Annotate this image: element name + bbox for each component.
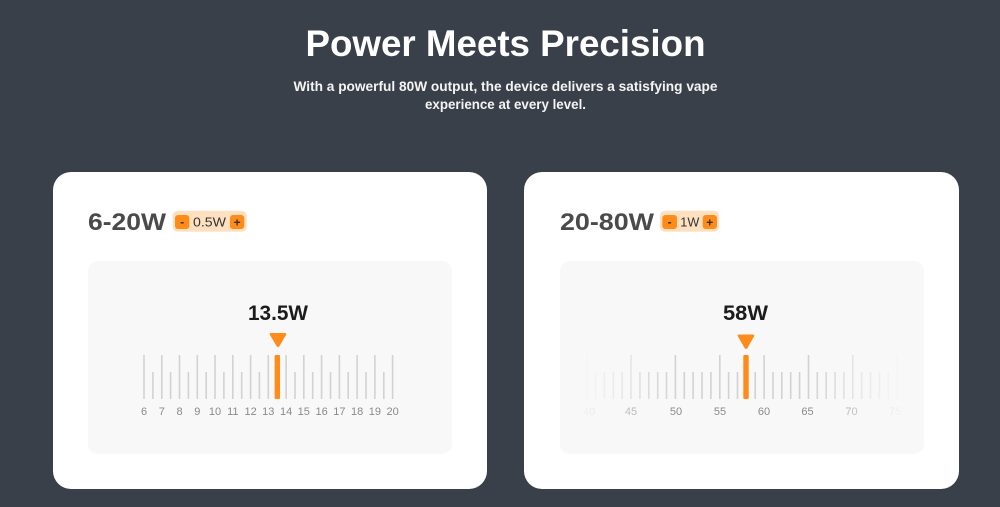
step control: 0.5W — [173, 211, 247, 232]
scale labels: 60 — [758, 406, 770, 418]
step control: 1W: + — [706, 216, 713, 230]
scale labels: 11 — [227, 406, 239, 418]
scale ticks — [587, 355, 897, 399]
chart panel: 20-80W dial — [560, 261, 924, 454]
step control: 0.5W: 0.5W — [193, 214, 227, 230]
icon: pointer triangle — [738, 334, 754, 349]
scale labels: 8 — [176, 406, 183, 418]
icon: pointer triangle — [270, 333, 286, 347]
scale labels: 12 — [244, 406, 257, 418]
readout: 13.5W: 13.5W — [248, 302, 308, 325]
scale labels: 13 — [262, 406, 274, 418]
scale labels: 7 — [159, 406, 165, 418]
readout: 58W: 58W — [723, 302, 768, 325]
step control: 1W: 1W — [680, 214, 700, 230]
scale labels: 40 — [583, 406, 595, 418]
scale labels: 55 — [714, 406, 726, 418]
subtitle: With a powerful 80W output, the device delivers a satisfying vape — [294, 78, 718, 94]
scale ticks — [144, 355, 393, 399]
scale labels: 9 — [194, 406, 200, 418]
title: Power Meets Precision — [306, 23, 706, 64]
scale labels: 75 — [889, 406, 901, 418]
step control: 1W — [660, 211, 719, 232]
scale labels: 18 — [351, 406, 363, 418]
marker: current value — [743, 355, 749, 399]
marker: current value — [275, 355, 280, 399]
step control: 0.5W: - — [180, 215, 184, 229]
panel: 6-20W card — [53, 172, 487, 489]
scale labels: 15 — [298, 406, 310, 418]
scale labels — [141, 406, 399, 418]
scale labels: 65 — [801, 406, 814, 418]
step control: 1W: - — [668, 215, 672, 229]
scale labels: 14 — [280, 406, 292, 418]
step control: 0.5W: + — [234, 216, 241, 230]
scale labels: 20 — [386, 406, 399, 418]
heading: 20-80W: 20-80W — [560, 209, 654, 236]
scale labels: 17 — [333, 406, 346, 418]
subtitle: experience at every level. — [425, 96, 586, 112]
scale labels: 16 — [315, 406, 328, 418]
scale labels: 70 — [845, 406, 858, 418]
subtitle — [294, 78, 718, 112]
scale labels: 50 — [670, 406, 682, 418]
scale labels: 45 — [625, 406, 637, 418]
scale labels: 6 — [141, 406, 147, 418]
scale labels: 19 — [369, 406, 381, 418]
scale labels: 10 — [209, 406, 221, 418]
chart panel: 6-20W dial — [88, 261, 452, 454]
scale labels — [583, 406, 901, 418]
panel: 20-80W card — [524, 172, 959, 489]
heading: 6-20W: 6-20W — [88, 209, 166, 236]
